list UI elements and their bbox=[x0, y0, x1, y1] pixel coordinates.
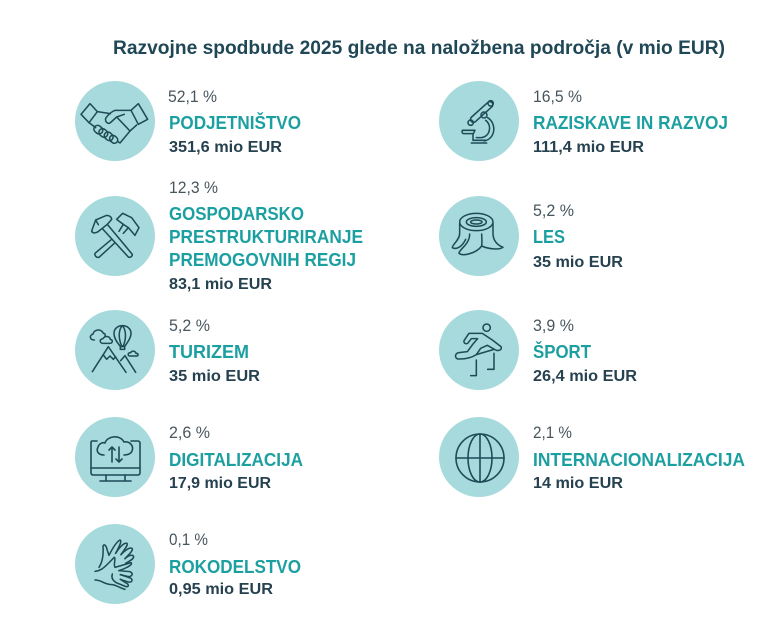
icon: crossed hammers bbox=[75, 196, 155, 276]
title: Razvojne spodbude 2025 glede na naložbena področja (v mio EUR) bbox=[113, 38, 725, 59]
heading: ŠPORT bbox=[533, 341, 592, 362]
item: digitalizacija bbox=[75, 417, 303, 497]
item: internacionalizacija bbox=[439, 417, 745, 497]
icon: handshake bbox=[75, 81, 155, 161]
icon: mountains with balloon bbox=[75, 310, 155, 390]
percentage: 5,2 % bbox=[533, 201, 574, 220]
percentage: 3,9 % bbox=[533, 316, 574, 335]
heading: INTERNACIONALIZACIJA bbox=[533, 449, 745, 470]
amount: 35 mio EUR bbox=[533, 254, 623, 271]
icon: hands bbox=[75, 524, 155, 604]
percentage: 16,5 % bbox=[533, 87, 582, 106]
percentage: 2,1 % bbox=[533, 423, 572, 442]
amount: 14 mio EUR bbox=[533, 475, 623, 492]
item: gospodarsko prestrukturiranje bbox=[75, 178, 363, 293]
item: raziskave in razvoj bbox=[439, 81, 728, 161]
amount: 111,4 mio EUR bbox=[533, 139, 644, 156]
icon: microscope bbox=[439, 81, 519, 161]
heading: GOSPODARSKO bbox=[169, 203, 304, 224]
percentage: 2,6 % bbox=[169, 423, 210, 442]
item: podjetništvo bbox=[75, 81, 301, 161]
amount: 351,6 mio EUR bbox=[169, 139, 282, 156]
amount: 35 mio EUR bbox=[169, 368, 260, 385]
item: turizem bbox=[75, 310, 260, 390]
item: les bbox=[439, 196, 623, 276]
percentage: 52,1 % bbox=[168, 87, 217, 106]
icon: globe bbox=[439, 417, 519, 497]
item: rokodelstvo bbox=[75, 524, 301, 604]
heading: RAZISKAVE IN RAZVOJ bbox=[533, 112, 728, 133]
amount: 83,1 mio EUR bbox=[169, 276, 272, 293]
heading: DIGITALIZACIJA bbox=[169, 449, 303, 470]
heading: ROKODELSTVO bbox=[169, 556, 301, 577]
heading: TURIZEM bbox=[169, 341, 249, 362]
heading: PODJETNIŠTVO bbox=[169, 112, 301, 133]
heading: PREMOGOVNIH REGIJ bbox=[169, 249, 356, 270]
item: šport bbox=[439, 310, 637, 390]
amount: 17,9 mio EUR bbox=[169, 475, 271, 492]
heading: PRESTRUKTURIRANJE bbox=[169, 226, 363, 247]
amount: 26,4 mio EUR bbox=[533, 368, 637, 385]
percentage: 0,1 % bbox=[169, 530, 208, 549]
amount: 0,95 mio EUR bbox=[169, 581, 273, 598]
icon: monitor with cloud bbox=[75, 417, 155, 497]
icon: hurdler bbox=[439, 310, 519, 390]
heading: LES bbox=[533, 226, 565, 247]
percentage: 5,2 % bbox=[169, 316, 210, 335]
percentage: 12,3 % bbox=[169, 178, 218, 197]
heading bbox=[169, 203, 363, 270]
icon: tree stump bbox=[439, 196, 519, 276]
